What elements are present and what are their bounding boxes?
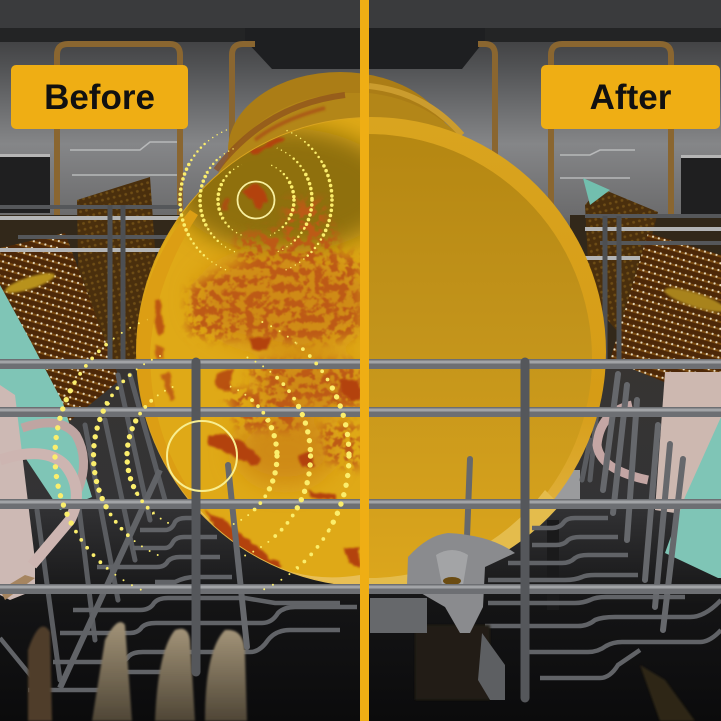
upper rack frames <box>57 44 671 215</box>
upper glasses, left and right <box>0 177 721 425</box>
dotted arcs: upper <box>180 124 332 276</box>
label: Before <box>11 65 188 129</box>
yellow plate <box>136 117 606 587</box>
label: After: After <box>590 78 671 117</box>
dotted arcs: lower <box>55 309 349 603</box>
focus circle: upper <box>238 182 274 218</box>
food stains on plate, before side <box>144 118 360 584</box>
target rings: upper stain <box>180 124 332 276</box>
teal and pink dishes, left <box>0 285 92 600</box>
centre divider line <box>360 0 369 721</box>
label: After <box>541 65 720 129</box>
upper rack wires <box>0 205 721 362</box>
teal and pink dishes, right <box>597 372 721 578</box>
lower rack background wires and pegs <box>37 375 600 680</box>
lower rack horizontal bars <box>0 362 721 589</box>
stacked plates behind <box>205 72 468 228</box>
pegs in front <box>228 374 683 647</box>
target rings: lower stain <box>55 309 349 603</box>
lower rack vertical posts <box>196 362 525 698</box>
tan items below rack <box>28 622 695 721</box>
gray plastic rack clip <box>370 533 515 700</box>
label: Before: Before <box>44 78 155 117</box>
focus circle: lower <box>167 421 237 491</box>
lower rack bent wires, left <box>0 470 357 690</box>
lower rack bent wires, right <box>485 518 721 678</box>
